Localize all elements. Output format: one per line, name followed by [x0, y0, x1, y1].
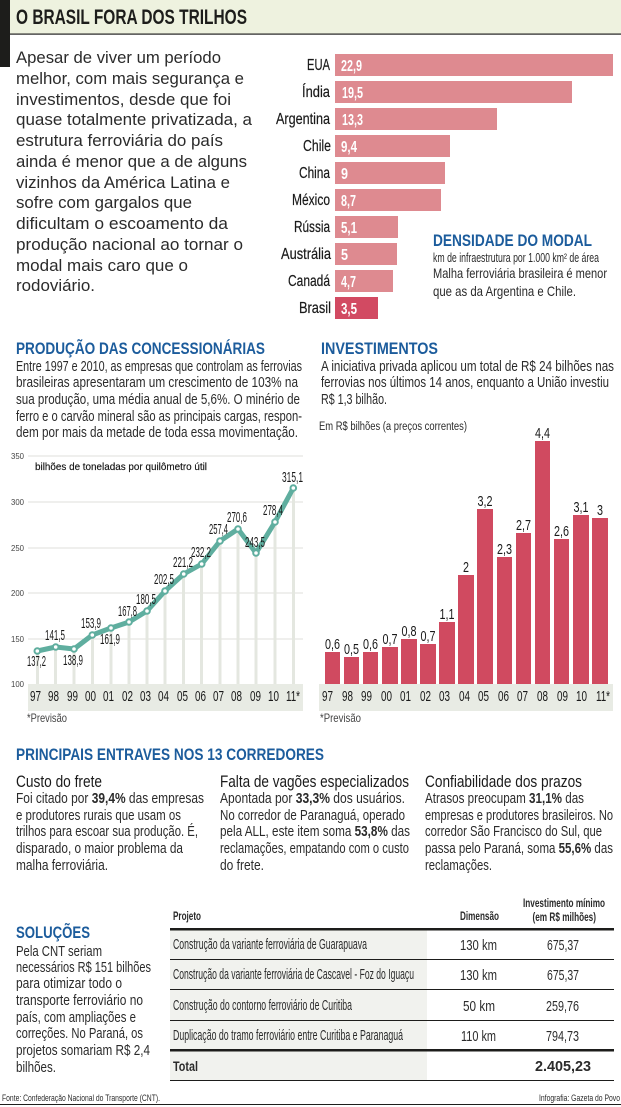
column: falta de vagões: do frete. [220, 858, 264, 874]
row: Guarapuava: Construção da variante ferroviária de Guarapuava [173, 937, 368, 953]
column: falta de vagões: Falta de vagões especializados [220, 773, 409, 791]
data values: 161,9 [100, 631, 120, 648]
row: total: Total [173, 1058, 198, 1074]
column: custo do frete: disparado, o maior problema da [16, 841, 184, 857]
column: confiabilidade dos prazos: reclamações. [425, 858, 492, 874]
year labels: 01 [103, 689, 114, 705]
bar: Índia [302, 81, 572, 103]
bar: EUA [307, 54, 613, 76]
year labels: 07 [517, 689, 528, 705]
year labels: 97 [322, 689, 333, 705]
row: total: 2.405,23 [535, 1058, 591, 1075]
year labels: 11* [286, 689, 300, 705]
year labels: 97 [30, 689, 41, 705]
table rules [170, 928, 614, 1081]
year labels: 03 [140, 689, 151, 705]
data values: 202,5 [154, 571, 174, 588]
axis labels: 150 [11, 635, 25, 644]
density heading and note: que as da Argentina e Chile. [433, 283, 576, 299]
column: custo do frete: e produtores rurais que usam os [16, 808, 181, 824]
year labels: 04 [459, 689, 470, 705]
year labels: 09 [250, 689, 261, 705]
bar: Chile: 9,4 [341, 139, 357, 156]
column: custo do frete: malha ferroviária. [16, 858, 108, 874]
title banner: O BRASIL FORA DOS TRILHOS [16, 6, 247, 29]
bar values: 2,6 [554, 524, 569, 540]
row: Cascavel: Construção da variante ferroviária de Cascavel - Foz do Iguaçu [173, 967, 414, 983]
section: investimentos: INVESTIMENTOS [321, 339, 438, 358]
bar: Austrália [281, 243, 397, 265]
bar values: 3 [597, 503, 603, 519]
data values: 315,1 [282, 469, 303, 486]
table header: Projeto [173, 909, 201, 923]
bar: México [292, 189, 441, 211]
bar values: 0,7 [382, 632, 398, 648]
bar: EUA: 22,9 [341, 58, 362, 75]
year labels: 03 [439, 689, 450, 705]
data values: 141,5 [45, 627, 65, 644]
year labels: 08 [231, 689, 242, 705]
data values: 221,2 [173, 554, 193, 571]
soluções text block: necessários R$ 151 bilhões [16, 960, 151, 976]
bar: Chile [303, 135, 450, 157]
year labels: 98 [48, 689, 59, 705]
year labels: 08 [537, 689, 548, 705]
year labels [30, 689, 300, 705]
soluções text block: para otimizar todo o [16, 976, 122, 992]
row: Guarapuava: 130 km [460, 938, 497, 954]
column: falta de vagões: reclamações, empatando com o custo [220, 841, 409, 857]
table: projects [170, 896, 614, 1081]
bar: EUA: EUA [307, 57, 330, 74]
row: Curitiba: Construção do contorno ferroviário de Curitiba [173, 998, 353, 1014]
row: Paranaguá: Duplicação do tramo ferroviário entre Curitiba e Paranaguá [173, 1028, 404, 1044]
table header [173, 896, 605, 924]
axis grid [28, 456, 303, 639]
year labels: 99 [67, 689, 78, 705]
bars [325, 441, 608, 684]
row: Curitiba [173, 998, 579, 1015]
year labels: 00 [85, 689, 96, 705]
year labels: 00 [381, 689, 392, 705]
section: produção das concessionárias [16, 338, 302, 441]
year labels: 02 [122, 689, 133, 705]
bar: Rússia: 5,1 [341, 220, 357, 237]
chart unit label: bilhões de toneladas por quilômetro útil [35, 461, 207, 473]
soluções text block: SOLUÇÕES [16, 922, 90, 942]
data values: 278,4 [263, 502, 283, 519]
intro text: estrutura ferroviária do país [16, 132, 223, 150]
bar: Austrália: 5 [341, 247, 348, 264]
bar: Austrália: Austrália [281, 246, 331, 263]
year labels: 10 [268, 689, 279, 705]
data values: 180,5 [136, 591, 156, 608]
soluções text block: correções. No Paraná, os [16, 1026, 143, 1042]
intro text: modal mais caro que o [16, 257, 188, 275]
bar values [325, 426, 603, 658]
bar: Canadá [288, 270, 393, 292]
section: produção das concessionárias: ferro e o carvão mineral são as principais cargas, respon- [16, 409, 302, 425]
row: Paranaguá: 110 km [461, 1029, 496, 1045]
data line [37, 488, 293, 651]
soluções text block: bilhões. [16, 1060, 56, 1076]
unit label: Em R$ bilhões (a preços correntes) [319, 421, 467, 433]
bar: Brasil [299, 297, 378, 319]
intro text: sofre com gargalos que [16, 194, 192, 212]
column: confiabilidade dos prazos: Confiabilidade dos prazos [425, 773, 582, 791]
column: confiabilidade dos prazos: passa pelo Paraná, soma 55,6% das [425, 841, 613, 857]
bar chart: density by country [276, 54, 613, 319]
bar values: 2 [463, 560, 469, 576]
intro text: vizinhos da América Latina e [16, 174, 230, 192]
year labels: 01 [400, 689, 411, 705]
axis labels: 200 [11, 589, 25, 598]
bar: China: China [299, 165, 330, 182]
soluções text block [16, 922, 151, 1076]
column: custo do frete [16, 773, 204, 874]
title banner [0, 0, 621, 67]
data points [34, 485, 296, 654]
bar: China: 9 [341, 166, 348, 183]
bar: México: 8,7 [341, 193, 356, 210]
column: custo do frete: Foi citado por 39,4% das empresas [16, 791, 204, 807]
bar: Argentina: Argentina [276, 111, 330, 128]
intro text: dificultam o escoamento da [16, 215, 229, 233]
bar: Rússia: Rússia [294, 219, 330, 236]
section: produção das concessionárias: brasileiras apresentaram um crescimento de 103% na [16, 375, 299, 391]
intro text: quase totalmente privatizada, a [16, 111, 253, 129]
column: falta de vagões [220, 773, 410, 874]
year labels: 06 [195, 689, 206, 705]
section: investimentos [321, 339, 614, 408]
year labels: 04 [158, 689, 169, 705]
intro text: ainda é menor que a de alguns [16, 153, 247, 171]
data values: 138,9 [63, 652, 83, 669]
bar values: 0,7 [420, 629, 436, 645]
row: Paranaguá: 794,73 [546, 1029, 579, 1045]
column: custo do frete: Custo do frete [16, 773, 102, 791]
section: investimentos: R$ 1,3 bilhão. [321, 392, 387, 408]
bar values: 0,6 [325, 637, 340, 653]
year labels: 02 [420, 689, 431, 705]
bar: Canadá: 4,7 [341, 274, 356, 291]
footer [0, 1093, 621, 1105]
soluções text block: projetos somariam R$ 2,4 [16, 1043, 150, 1059]
bar: Índia: 19,5 [342, 85, 363, 102]
bar: Brasil: Brasil [299, 300, 331, 317]
drop bars [36, 488, 295, 684]
footnote: *Previsão [27, 711, 67, 725]
row: Guarapuava: 675,37 [547, 938, 579, 954]
intro text: rodoviário. [16, 277, 95, 295]
data values: 167,8 [118, 603, 137, 620]
column: falta de vagões: Apontada por 33,3% dos usuários. [220, 791, 405, 807]
bar values: 2,3 [497, 542, 512, 558]
column: falta de vagões: pela ALL, este item soma 53,8% das [220, 824, 410, 840]
bar values: 1,1 [440, 607, 454, 623]
data values: 243,5 [245, 534, 265, 551]
footer: Fonte: Confederação Nacional do Transporte (CNT). [2, 1093, 160, 1103]
column: falta de vagões: No corredor de Paranaguá, operado [220, 808, 405, 824]
table header: Dimensão [460, 909, 499, 923]
intro text: investimentos, desde que foi [16, 91, 231, 109]
data values: 232,2 [191, 544, 211, 561]
year labels: 05 [177, 689, 188, 705]
bar values: 3,2 [478, 494, 492, 510]
bar values: 3,1 [574, 500, 588, 516]
intro text [16, 49, 253, 295]
bar values: 2,7 [516, 518, 531, 534]
year band [319, 684, 613, 711]
bar values: 0,5 [344, 642, 359, 658]
section: produção das concessionárias: Entre 1997 e 2010, as empresas que controlam as ferrovias [16, 359, 302, 375]
bar: Argentina [276, 108, 497, 130]
axis labels: 250 [11, 544, 25, 553]
axis labels: 300 [11, 498, 25, 507]
year labels: 09 [557, 689, 568, 705]
footnote: *Previsão [320, 711, 361, 725]
year labels: 06 [498, 689, 509, 705]
column: confiabilidade dos prazos: Atrasos preocupam 31,1% das [425, 791, 584, 807]
intro text: produção nacional ao tornar o [16, 236, 243, 254]
intro text: melhor, com mais segurança e [16, 70, 244, 88]
year labels: 98 [342, 689, 353, 705]
row: total [173, 1058, 591, 1075]
data values [27, 469, 303, 670]
axis labels: 100 [11, 680, 25, 689]
row: Curitiba: 259,76 [546, 999, 579, 1015]
bar values: 4,4 [535, 426, 550, 442]
bar chart: investments [319, 421, 613, 725]
line chart: production [11, 452, 303, 725]
soluções text block: país, com ampliações e [16, 1010, 136, 1026]
year labels: 11* [596, 689, 610, 705]
density heading and note [433, 231, 607, 299]
year labels: 07 [213, 689, 224, 705]
soluções text block: Pela CNT seriam [16, 944, 102, 960]
bar: Índia: Índia [302, 84, 330, 101]
bar: Rússia [294, 216, 398, 238]
bar values: 0,8 [402, 624, 416, 640]
row: Cascavel: 130 km [460, 968, 497, 984]
year labels: 05 [478, 689, 489, 705]
year labels: 10 [576, 689, 587, 705]
soluções text block: transporte ferroviário no [16, 993, 143, 1009]
data values: 270,6 [227, 509, 247, 526]
data values: 153,9 [81, 615, 101, 632]
intro text: Apesar de viver um período [16, 49, 221, 67]
axis labels: 350 [11, 452, 25, 461]
axis labels [11, 452, 25, 689]
bar: Canadá: Canadá [288, 273, 330, 290]
column: confiabilidade dos prazos [425, 773, 613, 874]
bar: Brasil: 3,5 [341, 301, 357, 318]
data values: 257,4 [209, 521, 228, 538]
bar: México: México [292, 192, 330, 209]
year labels: 99 [361, 689, 372, 705]
bar: Argentina: 13,3 [342, 112, 363, 129]
section: produção das concessionárias: sua produção, uma média anual de 5,6%. O minério de [16, 392, 300, 408]
section heading: entraves: PRINCIPAIS ENTRAVES NOS 13 CORREDORES [16, 745, 324, 764]
section: produção das concessionárias: PRODUÇÃO DAS CONCESSIONÁRIAS [16, 338, 265, 358]
bar: Chile: Chile [303, 138, 331, 155]
data values: 137,2 [27, 653, 46, 670]
row: Curitiba: 50 km [463, 999, 495, 1015]
year labels [322, 689, 610, 705]
row: Cascavel: 675,37 [547, 968, 579, 984]
bar values: 0,6 [363, 637, 378, 653]
column: custo do frete: trilhos para escoar sua produção. É, [16, 823, 198, 840]
section: produção das concessionárias: dem por mais da metade de toda essa movimentação. [16, 425, 298, 441]
bar: China [299, 162, 445, 184]
year band [28, 684, 303, 711]
